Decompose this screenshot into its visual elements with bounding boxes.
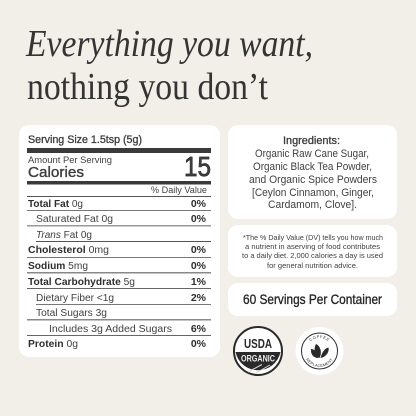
row: dietary fiber <box>36 292 207 304</box>
daily value header: % Daily Value <box>151 185 207 196</box>
amount per serving: Amount Per Serving <box>28 155 112 165</box>
row: trans fat: Trans Fat 0g <box>36 230 92 241</box>
row: total fat <box>28 198 207 210</box>
panel: servings per container <box>228 283 397 316</box>
icon: coffee replacement badge: COFFEE <box>309 335 330 341</box>
row: dietary fiber: 2% <box>191 292 207 304</box>
row: sodium: Sodium 5mg <box>28 261 88 272</box>
icon: coffee replacement badge: REPLACEMENT <box>306 358 332 368</box>
row: protein: Protein 0g <box>28 339 78 350</box>
calories value: 15 <box>184 151 211 182</box>
row: cholesterol <box>28 244 207 256</box>
calories label: Calories <box>28 164 84 181</box>
ingredients heading: Ingredients: <box>283 135 340 147</box>
panel: daily value footnote: *The % Daily Value (DV) tells you how much <box>243 233 383 242</box>
ingredients list: Organic Raw Cane Sugar, <box>255 148 369 160</box>
icon: USDA organic seal: ORGANIC <box>241 354 275 364</box>
panel: daily value footnote <box>228 225 397 277</box>
panel: ingredients <box>228 125 397 219</box>
icon: USDA organic seal: USDA <box>244 336 272 351</box>
row: cholesterol: Cholesterol 0mg <box>28 245 109 256</box>
row: protein <box>28 338 207 350</box>
row: total fat: Total Fat 0g <box>28 199 83 210</box>
panel: daily value footnote: a nutrient in aserving of food contributes <box>245 242 380 251</box>
row: added sugars: Includes 3g Added Sugars <box>49 324 172 335</box>
row: added sugars: 6% <box>191 323 207 335</box>
row: saturated fat: Saturated Fat 0g <box>36 214 113 225</box>
ingredients list: Cardamom, Clove]. <box>268 199 357 211</box>
title: nothing you don’t <box>27 66 268 108</box>
row: total sugars: Total Sugars 3g <box>36 308 107 319</box>
icon: USDA organic seal <box>234 327 282 375</box>
panel: nutrition facts <box>19 125 220 357</box>
ingredients list <box>249 148 377 211</box>
row: total fat: 0% <box>191 198 207 210</box>
row: saturated fat <box>36 213 207 225</box>
panel: servings per container: 60 Servings Per Container <box>243 291 382 307</box>
row: sodium <box>28 260 207 272</box>
ingredients list: Organic Black Tea Powder, <box>253 161 372 173</box>
ingredients list: and Organic Spice Powders <box>249 174 377 186</box>
row: added sugars <box>49 323 207 335</box>
serving size: Serving Size 1.5tsp (5g) <box>28 134 142 146</box>
row: total carbohydrate: 1% <box>191 276 207 288</box>
row: cholesterol: 0% <box>191 244 207 256</box>
ingredients list: [Ceylon Cinnamon, Ginger, <box>252 187 374 199</box>
title <box>25 23 313 108</box>
row: total carbohydrate: Total Carbohydrate 5g <box>28 277 135 288</box>
title: Everything you want, <box>25 23 313 65</box>
row: saturated fat: 0% <box>191 213 207 225</box>
row: total carbohydrate <box>28 276 207 288</box>
row: dietary fiber: Dietary Fiber <1g <box>36 293 114 304</box>
row: protein: 0% <box>191 338 207 350</box>
icon: coffee replacement badge <box>296 327 344 375</box>
panel: daily value footnote: for general nutrition advice. <box>267 261 358 270</box>
panel: daily value footnote: to a daily diet. 2,000 calories a day is used <box>242 251 383 260</box>
row: sodium: 0% <box>191 260 207 272</box>
